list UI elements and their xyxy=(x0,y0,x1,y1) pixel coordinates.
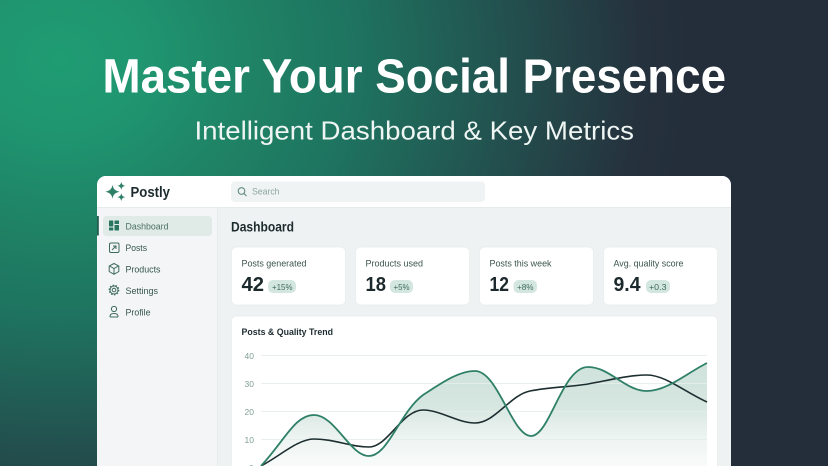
card: Posts generated xyxy=(232,247,346,305)
nav item: Profile xyxy=(110,306,150,318)
card: Avg. quality score xyxy=(604,247,718,305)
line: quality dark xyxy=(261,375,707,466)
y axis labels: 40 xyxy=(244,351,254,361)
card: Posts this week xyxy=(480,247,594,305)
nav item: Products: Products xyxy=(126,264,161,275)
card: Posts generated: 42 xyxy=(242,273,264,296)
card: Posts generated: Posts generated xyxy=(242,259,306,270)
icon: search xyxy=(238,188,246,196)
panel: sidebar xyxy=(97,208,218,466)
search box xyxy=(231,182,485,202)
y axis labels xyxy=(244,351,254,466)
panel: trend chart xyxy=(232,316,718,466)
card: Products used: 18 xyxy=(366,273,386,296)
card: Posts generated: +15% xyxy=(272,282,293,292)
card: Posts this week: Posts this week xyxy=(490,259,552,270)
subtitle: Intelligent Dashboard & Key Metrics xyxy=(194,116,634,146)
icon: sparkle logo xyxy=(106,182,125,201)
nav item: Dashboard active xyxy=(97,216,212,236)
logo wordmark: Postly xyxy=(130,185,170,201)
page heading: Dashboard xyxy=(231,220,294,234)
icon: dashboard grid xyxy=(109,220,119,230)
area under green line xyxy=(261,363,707,466)
card: Products used: Products used xyxy=(366,259,423,270)
y axis labels: 20 xyxy=(244,407,254,417)
nav item: Products xyxy=(109,264,161,275)
card: Avg. quality score: +0.3 xyxy=(649,282,667,292)
card: Posts this week: 12 xyxy=(490,273,509,296)
line: posts green xyxy=(261,363,707,466)
card: Products used: +5% xyxy=(394,282,410,292)
nav item: Settings xyxy=(109,285,158,297)
card: Posts this week: +8% xyxy=(517,282,534,292)
nav item: Dashboard active: Dashboard xyxy=(126,221,168,232)
card: Avg. quality score: 9.4 xyxy=(614,273,641,296)
icon: box xyxy=(109,264,119,274)
icon: person xyxy=(110,306,118,317)
nav item: Posts: Posts xyxy=(126,243,147,254)
chart title: Posts & Quality Trend xyxy=(242,327,333,338)
card: Avg. quality score: Avg. quality score xyxy=(614,259,684,270)
y axis labels: 30 xyxy=(244,379,254,389)
y axis labels: 10 xyxy=(244,435,254,445)
nav item: Settings: Settings xyxy=(126,286,158,297)
icon: posts xyxy=(110,243,119,252)
search placeholder: Search xyxy=(252,187,280,198)
nav item: Profile: Profile xyxy=(126,307,150,318)
panel: top bar xyxy=(97,176,731,208)
panel: dashboard window xyxy=(97,176,731,466)
title: Master Your Social Presence xyxy=(102,50,726,104)
nav item: Posts xyxy=(110,243,147,254)
icon: gear xyxy=(109,285,119,295)
card: Products used xyxy=(356,247,470,305)
